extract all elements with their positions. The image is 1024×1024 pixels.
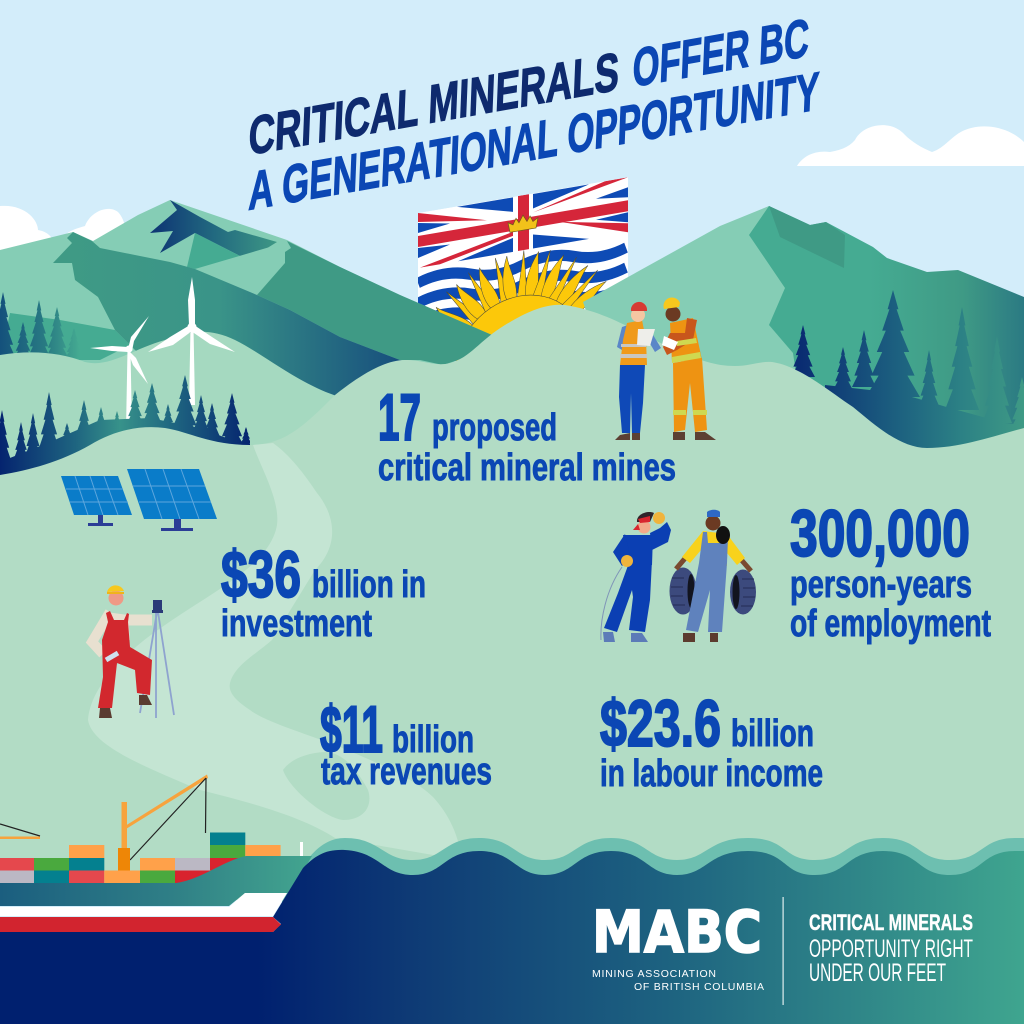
stat: 36 billion investment: investment [221, 603, 372, 645]
main green band [53, 232, 430, 400]
light mountain [583, 206, 820, 470]
container ship [0, 774, 312, 916]
workers with clipboard [615, 297, 716, 440]
welder [601, 512, 671, 642]
wind turbines [90, 277, 235, 430]
tire: right [730, 570, 756, 614]
surveyor [92, 585, 174, 718]
mountains left [0, 200, 492, 400]
stat: 17 proposed mines: proposed [432, 407, 557, 449]
stat: 17 proposed mines: 17 [378, 380, 421, 454]
green flank [749, 206, 1024, 470]
red ship stripe [0, 917, 281, 932]
stat: 36 billion investment [221, 537, 426, 645]
left crane [0, 824, 40, 839]
small turbine [90, 316, 149, 430]
stat: 300,000 person-years [790, 496, 991, 645]
ocean waves back [282, 838, 1024, 1024]
front hill [0, 305, 1024, 900]
far trees [0, 292, 74, 358]
tire: left [670, 568, 696, 614]
stat: 11 billion tax revenues: tax revenues [321, 751, 492, 793]
hull [0, 856, 312, 906]
right forest [794, 290, 1024, 448]
stat: 11 billion tax revenues: $11 [320, 692, 383, 766]
green ridge right [257, 241, 492, 365]
tripod [140, 600, 174, 718]
MABC logo: MINING ASSOCIATION [592, 968, 717, 980]
stat: 11 billion tax revenues: billion [392, 719, 474, 761]
tagline [809, 910, 973, 987]
large turbine [148, 277, 235, 405]
setting sun [431, 236, 609, 441]
British Columbia flag [418, 177, 628, 361]
title: CRITICAL MINERALS [248, 41, 620, 167]
ground under far trees [0, 313, 130, 360]
mid hill [0, 332, 340, 490]
near forest [0, 375, 250, 475]
peak facet [187, 233, 248, 269]
divider [782, 897, 784, 1005]
solar panels [61, 469, 217, 531]
stat: 23.6 billion labour income: billion [731, 713, 814, 755]
stat: 11 billion tax revenues [320, 692, 492, 793]
back light mountain [0, 200, 492, 400]
clouds [0, 125, 1024, 250]
MABC logo [592, 898, 765, 993]
mountains right [583, 206, 1024, 470]
stat: 23.6 billion labour income [600, 686, 823, 795]
stat: 36 billion investment: billion in [312, 564, 426, 606]
stat: 300,000 person-years: person-years [790, 564, 972, 606]
lit ridge [195, 242, 291, 295]
worker: orange coveralls [662, 297, 716, 440]
stat: 17 proposed mines [378, 380, 676, 489]
MABC logo: OF BRITISH COLUMBIA [634, 981, 765, 993]
white stripe [0, 893, 287, 916]
pale path [88, 443, 462, 860]
stat: 17 proposed mines: critical mineral mines [378, 447, 676, 489]
crown [508, 213, 538, 233]
stat: 36 billion investment: $36 [221, 537, 301, 611]
containers [0, 832, 281, 883]
stat: 300,000 person-years: 300,000 [790, 496, 970, 570]
mechanic with tires [670, 510, 756, 642]
path island [283, 752, 369, 820]
deck crane [118, 774, 208, 870]
stat: 23.6 billion labour income: $23.6 [600, 686, 721, 760]
dark facet [769, 206, 845, 268]
ocean waves front [0, 850, 1024, 1024]
MABC logo: MABC [592, 898, 762, 966]
stat: 23.6 billion labour income: in labour income [600, 753, 823, 795]
small panel [61, 476, 132, 526]
large panel [127, 469, 217, 531]
worker: clipboard [615, 302, 661, 440]
dark peak [150, 200, 277, 260]
